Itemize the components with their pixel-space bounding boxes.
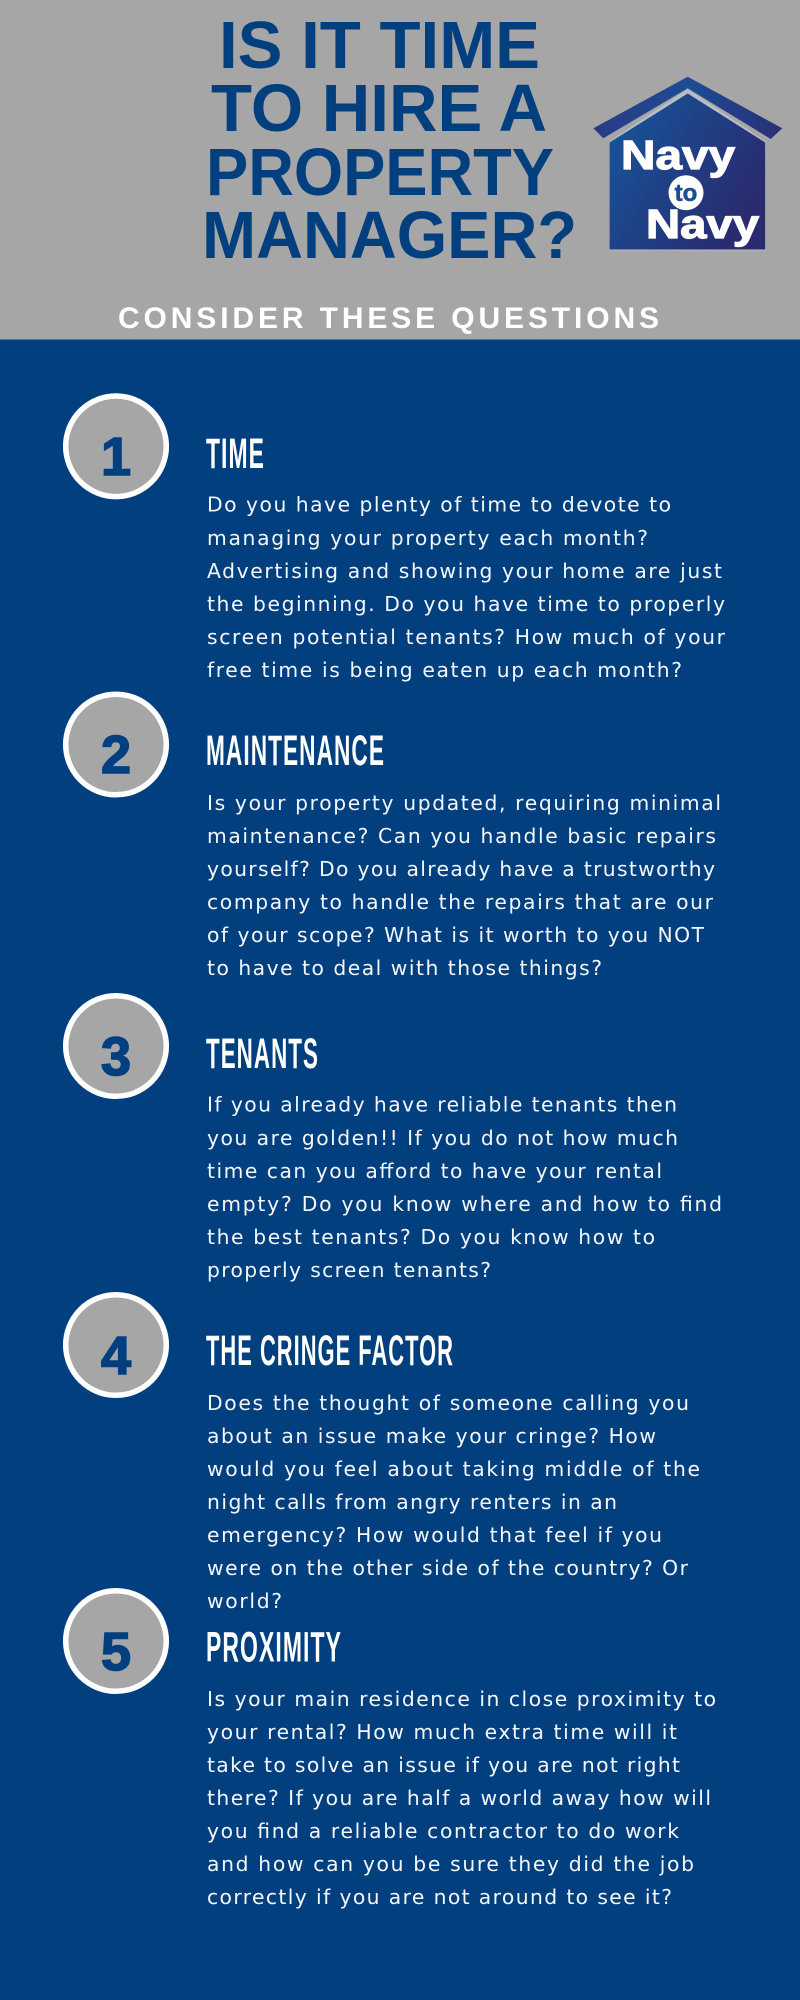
panel: question 5 proximity: [66, 1591, 716, 1909]
panel: question 2 maintenance: [66, 694, 721, 980]
body text: maintenance: yourself? Do you already have a trustworthy: [207, 857, 715, 881]
body text: maintenance: [207, 791, 721, 980]
number badge 4: 4: [101, 1326, 131, 1386]
number badge 2: 2: [101, 725, 131, 785]
body text: proximity: your rental? How much extra time will it: [207, 1720, 677, 1744]
panel: question 4 the cringe factor: [66, 1295, 700, 1613]
body text: tenants: If you already have reliable tenants then: [207, 1093, 677, 1117]
body text: proximity: there? If you are half a world away how will: [207, 1786, 711, 1810]
number badge 5: 5: [101, 1622, 131, 1682]
icon: Navy to Navy house logo: [593, 77, 782, 250]
panel: question 3 tenants: [66, 996, 722, 1282]
panel: question 1 time: [66, 396, 726, 682]
body text: maintenance: maintenance? Can you handle basic repairs: [207, 824, 716, 848]
body text: proximity: take to solve an issue if you are not right: [207, 1753, 680, 1777]
heading: tenants: TENANTS: [206, 1030, 319, 1078]
body text: time: free time is being eaten up each month?: [207, 658, 682, 682]
header panel: [0, 0, 800, 340]
number badge 2: [66, 694, 166, 795]
number badge 5: [66, 1591, 166, 1691]
body text: the cringe factor: [207, 1391, 700, 1613]
icon: Navy to Navy house logo: to: [675, 180, 697, 207]
number badge 3: 3: [101, 1027, 131, 1087]
body text: tenants: [207, 1093, 722, 1282]
body text: maintenance: of your scope? What is it worth to you NOT: [207, 923, 705, 947]
body text: the cringe factor: were on the other side of the country? Or: [207, 1556, 689, 1580]
body text: time: Advertising and showing your home are just: [207, 559, 722, 583]
heading: proximity: PROXIMITY: [206, 1624, 342, 1672]
body text: maintenance: company to handle the repairs that are our: [207, 890, 714, 914]
body text: tenants: empty? Do you know where and how to find: [207, 1192, 722, 1216]
icon: Navy to Navy house logo: Navy: [621, 132, 735, 178]
body text: proximity: correctly if you are not around to see it?: [207, 1885, 672, 1909]
title: MANAGER?: [202, 198, 577, 273]
title: IS IT TIME: [219, 8, 540, 83]
number badge 1: 1: [101, 427, 131, 487]
heading: the cringe factor: THE CRINGE FACTOR: [206, 1327, 454, 1375]
body text: time: managing your property each month?: [207, 526, 648, 550]
body text: the cringe factor: night calls from angry renters in an: [207, 1490, 617, 1514]
body text: proximity: and how can you be sure they did the job: [207, 1852, 694, 1876]
body text: the cringe factor: would you feel about taking middle of the: [207, 1457, 700, 1481]
body text: maintenance: to have to deal with those things?: [207, 956, 602, 980]
body text: the cringe factor: about an issue make your cringe? How: [207, 1424, 656, 1448]
title: [202, 8, 577, 273]
body text: maintenance: Is your property updated, requiring minimal: [207, 791, 721, 815]
body text: time: screen potential tenants? How much of your: [207, 625, 726, 649]
icon: Navy to Navy house logo: Navy: [646, 201, 759, 247]
body text: tenants: time can you afford to have your rental: [207, 1159, 662, 1183]
heading: time: TIME: [206, 430, 265, 478]
body text: the cringe factor: emergency? How would that feel if you: [207, 1523, 662, 1547]
body text: proximity: you find a reliable contractor to do work: [207, 1819, 679, 1843]
heading: maintenance: MAINTENANCE: [206, 727, 385, 775]
body text: tenants: the best tenants? Do you know how to: [207, 1225, 655, 1249]
subtitle: CONSIDER THESE QUESTIONS: [118, 302, 659, 335]
title: PROPERTY: [206, 135, 554, 210]
body text: time: Do you have plenty of time to devote to: [207, 493, 671, 517]
number badge 4: [66, 1295, 166, 1395]
body text: the cringe factor: world?: [207, 1589, 282, 1613]
body text: tenants: properly screen tenants?: [207, 1258, 491, 1282]
number badge 1: [66, 396, 166, 497]
title: TO HIRE A: [211, 71, 547, 146]
number badge 3: [66, 996, 166, 1096]
body text: tenants: you are golden!! If you do not how much: [207, 1126, 678, 1150]
body text: proximity: [207, 1687, 716, 1909]
body text: time: [207, 493, 726, 682]
body text: the cringe factor: Does the thought of someone calling you: [207, 1391, 689, 1415]
body text: proximity: Is your main residence in close proximity to: [207, 1687, 716, 1711]
body text: time: the beginning. Do you have time to properly: [207, 592, 725, 616]
